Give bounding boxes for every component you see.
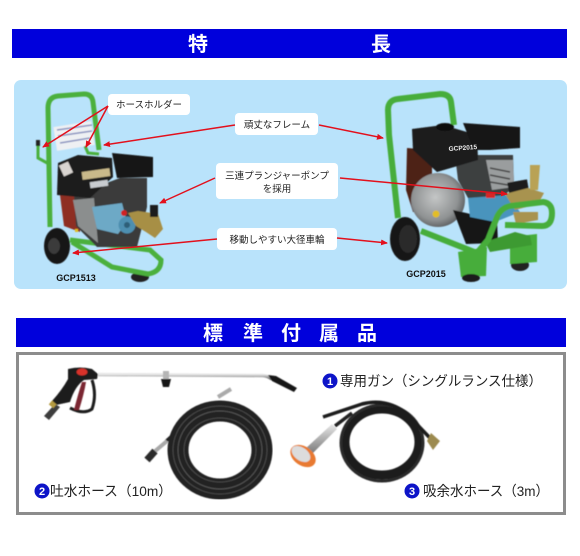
label: item 1 spray gun: 1 [327, 376, 333, 388]
heading bar: features: 特 [188, 33, 208, 56]
machine: GCP2015 [388, 94, 552, 282]
model label: GCP2015: GCP2015 [406, 269, 446, 279]
heading bar: standard accessories [16, 318, 566, 347]
callout: sturdy frame: 頑丈なフレーム [244, 120, 310, 131]
callout: large wheels [217, 228, 337, 250]
label: item 2 discharge hose: 2 [39, 486, 45, 498]
model label: GCP1513: GCP1513 [56, 273, 96, 283]
callout: triplex plunger pump: 三連プランジャーポンプ [225, 170, 329, 182]
heading bar: standard accessories: 品 [357, 323, 377, 345]
engine label: GCP2015: GCP2015 [448, 144, 478, 153]
label: item 3 suction hose: 吸余水ホース（3m） [423, 483, 549, 499]
heading bar: standard accessories: 属 [319, 323, 339, 345]
panel: accessories [18, 354, 564, 514]
label: item 2 discharge hose: 吐水ホース（10m） [50, 483, 172, 499]
machine: GCP1513 [36, 94, 163, 282]
callout: large wheels: 移動しやすい大径車輪 [230, 234, 325, 246]
photo: discharge hose coil [147, 389, 267, 494]
callout: triplex plunger pump [216, 163, 338, 199]
heading bar: features [12, 29, 567, 58]
arrows: callout pointers [43, 106, 507, 253]
heading bar: standard accessories: 付 [281, 322, 301, 345]
callout: hose holder: ホースホルダー [116, 99, 182, 111]
heading bar: standard accessories: 準 [243, 322, 263, 345]
callout: sturdy frame [235, 113, 318, 135]
photo: suction hose with strainer [286, 402, 440, 481]
callout: triplex plunger pump: を採用 [263, 183, 291, 195]
heading bar: standard accessories: 標 [203, 322, 223, 345]
callout: hose holder [108, 94, 190, 115]
heading bar: features: 長 [371, 34, 391, 56]
label: item 1 spray gun: 専用ガン（シングルランス仕様） [340, 373, 542, 389]
photo: spray gun [44, 368, 297, 420]
panel: features [14, 80, 567, 289]
label: item 3 suction hose: 3 [409, 486, 415, 498]
